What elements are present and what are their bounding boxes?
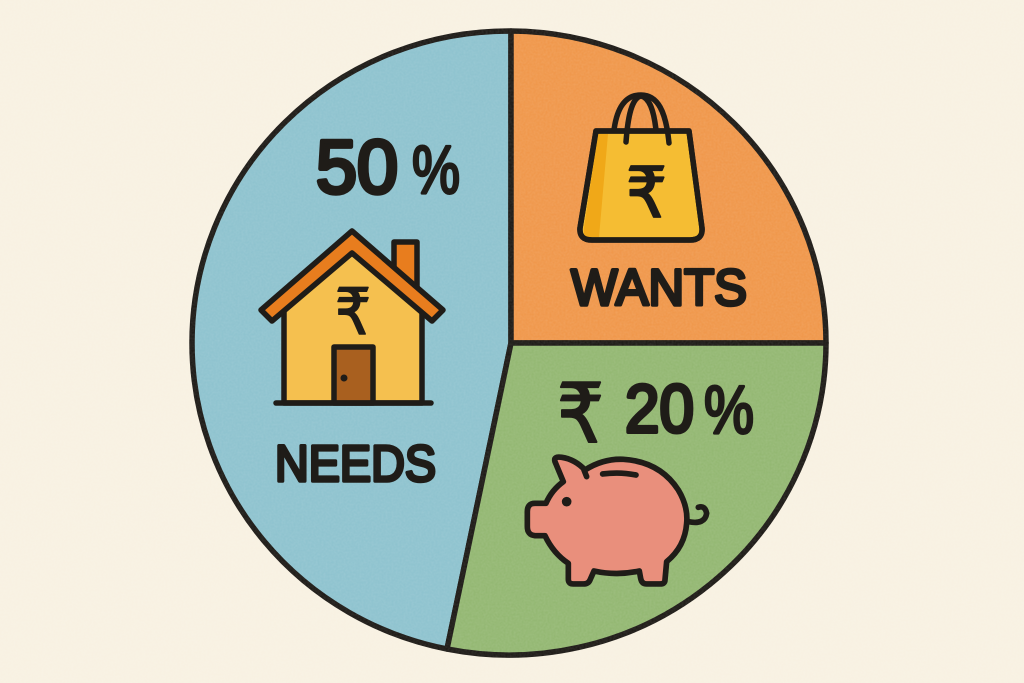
eye [565,500,569,504]
needs percentage: 50 [316,125,398,209]
coin slot [603,473,636,475]
icon: house [261,231,443,403]
wants label: WANTS [571,259,747,316]
slice: wants [511,31,826,343]
chimney [394,242,417,288]
bag outline [580,131,702,240]
rupee symbol: ₹ [557,367,604,462]
slice: needs 50% [192,31,511,649]
tail [688,507,707,522]
pig body [527,457,687,584]
20 digits: 20 [625,371,694,447]
percent sign: % [704,372,754,448]
bag body [580,131,702,240]
slice: savings 20% [447,343,826,655]
door [334,347,373,403]
pie chart [192,31,826,655]
needs percentage: % [412,132,460,208]
rupee symbol on house: ₹ [335,276,371,350]
door knob [342,376,346,380]
icon: piggy bank [527,457,707,584]
roof [261,231,443,321]
needs label: NEEDS [275,435,436,492]
ear line [584,470,587,477]
rupee symbol on bag: ₹ [626,152,667,234]
needs percentage [316,125,460,209]
inner handle [626,96,656,142]
ground line [276,400,431,406]
icon: shopping bag [580,95,702,240]
walls [284,253,422,403]
savings percentage [557,367,754,462]
handles [614,95,669,143]
bag fold shade [584,134,608,237]
